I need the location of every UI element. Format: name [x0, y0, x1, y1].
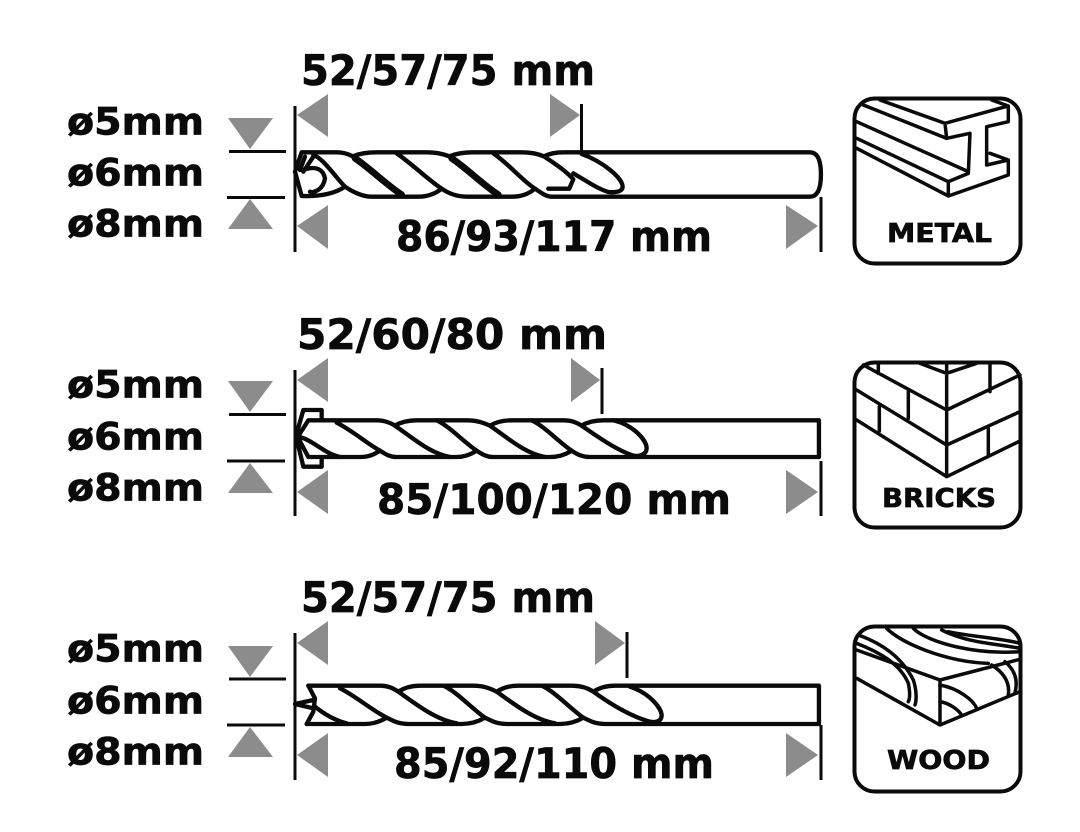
total length arrows: [297, 470, 818, 514]
icon: wood plank: [857, 628, 1020, 725]
diameter list: ø5mm: [67, 364, 204, 406]
flute length arrows: [295, 94, 821, 252]
panel: bricks icon: [854, 362, 1020, 528]
flute length label: 52/57/75 mm: [301, 573, 595, 622]
diameter list: ø5mm: [67, 100, 204, 144]
panel: metal drill bit: [67, 46, 821, 261]
panel: metal icon: [854, 98, 1020, 264]
diameter list: [67, 628, 204, 774]
panel: wood icon: [854, 626, 1020, 792]
diameter list: ø8mm: [67, 730, 204, 774]
diameter arrows: [227, 118, 286, 229]
total length arrows: [297, 733, 818, 777]
diameter arrows: [227, 646, 286, 757]
flute length label: 52/60/80 mm: [297, 310, 607, 359]
icon: steel beam: [857, 100, 1008, 196]
icon frame: [854, 362, 1020, 528]
diameter list: ø5mm: [67, 628, 204, 670]
wood drill drawing: [295, 686, 819, 724]
label: bricks: BRICKS: [882, 484, 996, 514]
flute length arrows: [295, 358, 821, 516]
diameter list: ø6mm: [67, 152, 204, 194]
diameter list: ø6mm: [67, 680, 204, 722]
panel: bricks drill bit: [67, 310, 821, 524]
diameter list: [67, 364, 204, 510]
diameter list: ø6mm: [67, 416, 204, 458]
diameter list: [67, 100, 204, 246]
diameter list: ø8mm: [67, 202, 204, 246]
flute length label: 52/57/75 mm: [301, 46, 595, 95]
total length arrows: [297, 205, 818, 249]
label: wood: WOOD: [887, 746, 990, 776]
icon frame: [854, 626, 1020, 792]
label: metal: METAL: [887, 219, 992, 249]
total length label: 85/100/120 mm: [377, 475, 731, 524]
icon frame: [854, 98, 1020, 264]
diameter arrows: [227, 381, 286, 493]
masonry drill drawing: [296, 410, 819, 467]
icon: brick wall corner: [857, 363, 1020, 477]
diameter list: ø8mm: [67, 466, 204, 510]
panel: wood drill bit: [67, 573, 821, 788]
total length label: 86/93/117 mm: [396, 212, 712, 261]
metal twist drill drawing: [295, 152, 821, 197]
flute length arrows: [295, 621, 821, 780]
total length label: 85/92/110 mm: [394, 739, 714, 788]
